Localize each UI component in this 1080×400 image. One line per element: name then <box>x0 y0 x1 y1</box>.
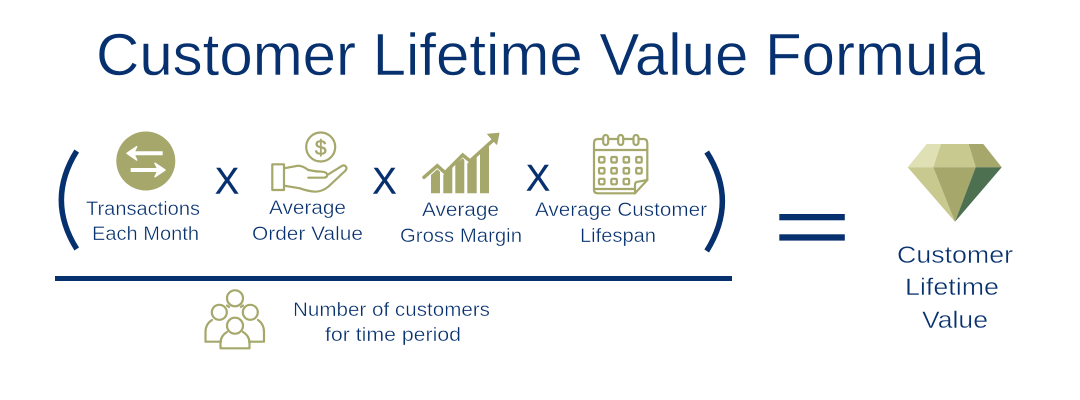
title: Customer Lifetime Value Formula <box>96 22 985 88</box>
factor: average gross margin <box>400 133 522 247</box>
icon: transaction arrows <box>116 132 175 190</box>
result: customer lifetime value <box>897 144 1013 334</box>
right parenthesis <box>707 152 722 251</box>
icon: hand holding coin <box>272 132 346 192</box>
multiply sign 1: X <box>215 160 239 202</box>
fraction bar <box>55 276 732 281</box>
factor: average order value <box>252 132 363 245</box>
left parenthesis <box>61 151 77 249</box>
icon: rising bar chart <box>424 133 499 193</box>
factor: transactions each month <box>86 132 200 245</box>
icon: group of people <box>206 290 264 348</box>
label: number of customers for time period: Number of customers <box>293 300 490 321</box>
denominator: number of customers <box>206 290 490 348</box>
label: number of customers for time period: for time period <box>325 325 461 346</box>
icon: calendar <box>594 135 647 193</box>
label: average order value: Order Value <box>252 224 363 245</box>
multiply sign 3: X <box>526 158 550 199</box>
multiply sign 2: X <box>372 160 396 202</box>
factor: average customer lifespan <box>535 135 708 247</box>
label: average customer lifespan: Average Customer <box>535 200 708 221</box>
label: average gross margin: Average <box>422 200 499 221</box>
label: customer lifetime value: Value <box>922 307 988 334</box>
equals sign <box>779 214 845 241</box>
label: customer lifetime value: Customer <box>897 242 1013 269</box>
label: average order value: Average <box>269 198 346 219</box>
icon: diamond <box>908 144 1002 222</box>
label: transactions each month: Transactions <box>86 199 200 220</box>
label: customer lifetime value: Lifetime <box>905 274 999 301</box>
label: average gross margin: Gross Margin <box>400 226 522 247</box>
label: transactions each month: Each Month <box>92 224 199 245</box>
dollar sign: $ <box>315 137 327 160</box>
label: average customer lifespan: Lifespan <box>580 226 656 247</box>
